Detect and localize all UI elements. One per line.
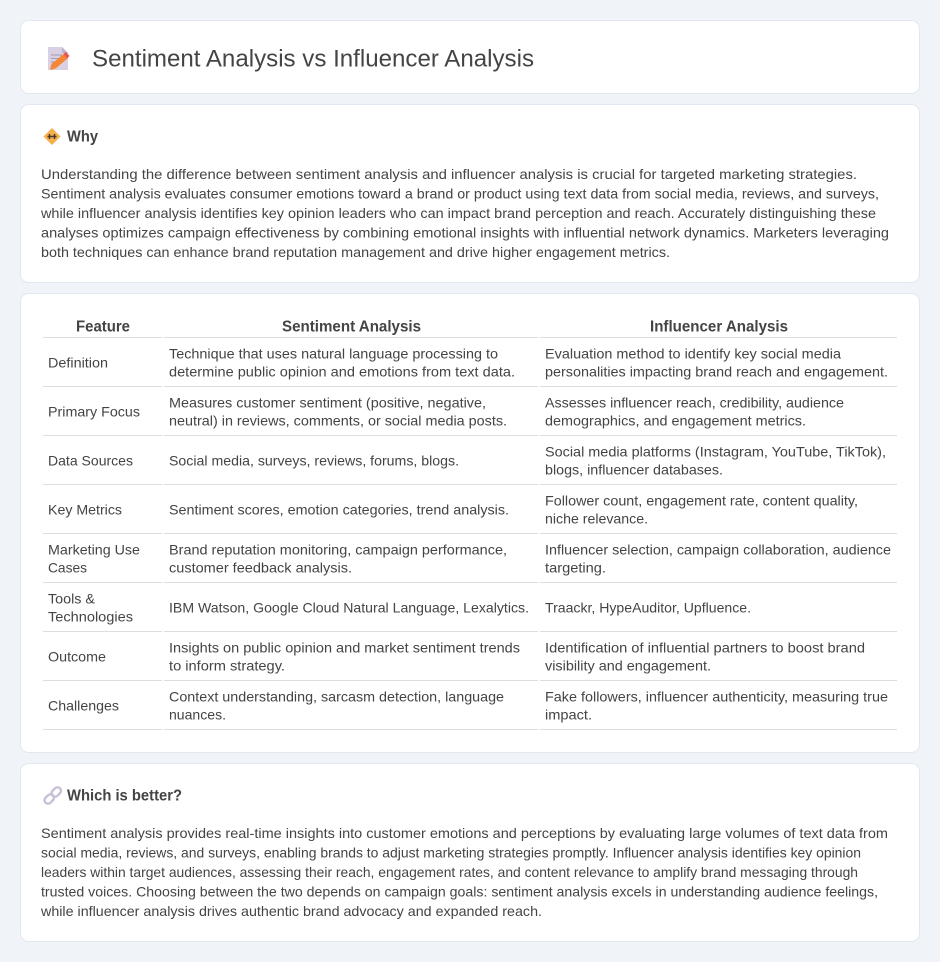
row: tools and technologies: Technologies bbox=[48, 608, 133, 624]
table header: Sentiment Analysis bbox=[282, 318, 421, 336]
row: primary focus: Primary Focus bbox=[48, 404, 140, 420]
row: challenges: Context understanding, sarcasm detection, language bbox=[169, 688, 504, 704]
row: data sources: Data Sources bbox=[48, 452, 133, 468]
row: data sources: blogs, influencer databases. bbox=[545, 462, 723, 478]
row: data sources: Social media platforms (Instagram, YouTube, TikTok), bbox=[545, 444, 886, 460]
text block: why: both techniques can enhance brand reputation management and drive higher engagement metrics. bbox=[41, 244, 670, 260]
row: outcome: to inform strategy. bbox=[169, 658, 285, 674]
text block: which is better: Sentiment analysis provides real-time insights into customer emotions and perceptions by evaluating large volumes of text data from bbox=[41, 825, 888, 841]
row: challenges bbox=[48, 688, 888, 722]
row: key metrics: Key Metrics bbox=[48, 502, 122, 518]
row: challenges: nuances. bbox=[169, 706, 226, 722]
icon: memo bbox=[48, 47, 70, 70]
row: challenges: Fake followers, influencer authenticity, measuring true bbox=[545, 688, 888, 704]
panel: why bbox=[20, 104, 920, 282]
row: marketing use cases: targeting. bbox=[545, 560, 606, 576]
row: data sources bbox=[48, 444, 886, 478]
text block: which is better: while influencer analysis drives authentic brand advocacy and expanded reach. bbox=[40, 903, 542, 919]
row: tools and technologies: IBM Watson, Google Cloud Natural Language, Lexalytics. bbox=[169, 600, 529, 616]
table header: Influencer Analysis bbox=[650, 318, 788, 336]
icon: diamond sign bbox=[44, 128, 60, 145]
row: key metrics: niche relevance. bbox=[545, 510, 648, 526]
row: outcome bbox=[48, 640, 865, 674]
panel: title bbox=[20, 20, 920, 94]
table header bbox=[76, 318, 788, 336]
text block: why bbox=[40, 166, 889, 260]
panel: which is better bbox=[20, 764, 920, 942]
heading: why: Why bbox=[67, 128, 98, 146]
row: definition: Technique that uses natural language processing to bbox=[169, 346, 498, 362]
row: outcome: Outcome bbox=[48, 648, 106, 664]
row: key metrics bbox=[48, 492, 858, 526]
text block: why: Understanding the difference between sentiment analysis and influencer analysis is crucial for targeted marketing strategies. bbox=[41, 166, 857, 182]
row: marketing use cases: Marketing Use bbox=[48, 542, 140, 558]
row: marketing use cases: Brand reputation monitoring, campaign performance, bbox=[169, 542, 507, 558]
icon: link bbox=[43, 786, 62, 805]
panel: comparison table bbox=[20, 294, 920, 752]
row: tools and technologies: Traackr, HypeAuditor, Upfluence. bbox=[545, 600, 751, 616]
row: marketing use cases: customer feedback analysis. bbox=[169, 560, 352, 576]
row: definition: personalities impacting brand reach and engagement. bbox=[545, 364, 888, 380]
row: key metrics: Follower count, engagement rate, content quality, bbox=[545, 492, 858, 508]
row: marketing use cases bbox=[48, 542, 891, 576]
row: challenges: impact. bbox=[545, 706, 592, 722]
text block: which is better: leaders within target audiences, assessing their reach, engagement rates, and content relevance to amplify brand messaging through bbox=[41, 864, 858, 880]
text block: which is better bbox=[40, 825, 888, 919]
row: tools and technologies: Tools & bbox=[48, 590, 96, 606]
row: outcome: Insights on public opinion and market sentiment trends bbox=[169, 640, 520, 656]
row: definition: determine public opinion and emotions from text data. bbox=[169, 364, 515, 380]
row: definition bbox=[48, 346, 888, 380]
row: challenges: Challenges bbox=[48, 698, 119, 714]
row: marketing use cases: Cases bbox=[48, 560, 87, 576]
text block: which is better: social media, reviews, and surveys, enabling brands to adjust marketing strategies promptly. Influencer analysis identifies key opinion bbox=[41, 844, 861, 860]
text block: why: while influencer analysis identifies key opinion leaders who can impact brand perception and reach. Accurately distinguishing these bbox=[40, 205, 876, 221]
text block: why: analyses optimizes campaign effectiveness by combining emotional insights with influential network dynamics. Marketers leveraging bbox=[41, 224, 889, 240]
row: primary focus: Assesses influencer reach, credibility, audience bbox=[545, 394, 844, 410]
row: outcome: visibility and engagement. bbox=[545, 658, 711, 674]
row: marketing use cases: Influencer selection, campaign collaboration, audience bbox=[545, 542, 891, 558]
heading: which is better: Which is better? bbox=[67, 788, 182, 804]
row: definition: Evaluation method to identify key social media bbox=[545, 346, 841, 362]
row: tools and technologies bbox=[48, 590, 751, 624]
row: primary focus bbox=[48, 394, 844, 428]
row: primary focus: neutral) in reviews, comments, or social media posts. bbox=[169, 412, 507, 428]
row: primary focus: demographics, and engagement metrics. bbox=[545, 412, 806, 428]
heading: Sentiment Analysis vs Influencer Analysis bbox=[92, 46, 534, 72]
row: definition: Definition bbox=[48, 354, 108, 370]
row: key metrics: Sentiment scores, emotion categories, trend analysis. bbox=[169, 502, 509, 518]
table header: Feature bbox=[76, 318, 130, 336]
row: data sources: Social media, surveys, reviews, forums, blogs. bbox=[169, 452, 459, 468]
row: primary focus: Measures customer sentiment (positive, negative, bbox=[169, 394, 486, 410]
row: outcome: Identification of influential partners to boost brand bbox=[545, 640, 865, 656]
text block: why: Sentiment analysis evaluates consumer emotions toward a brand or product using text data from social media, reviews, and surveys, bbox=[41, 186, 879, 202]
text block: which is better: trusted voices. Choosing between the two depends on campaign goals: sentiment analysis excels in understanding audience feelings, bbox=[41, 884, 878, 900]
